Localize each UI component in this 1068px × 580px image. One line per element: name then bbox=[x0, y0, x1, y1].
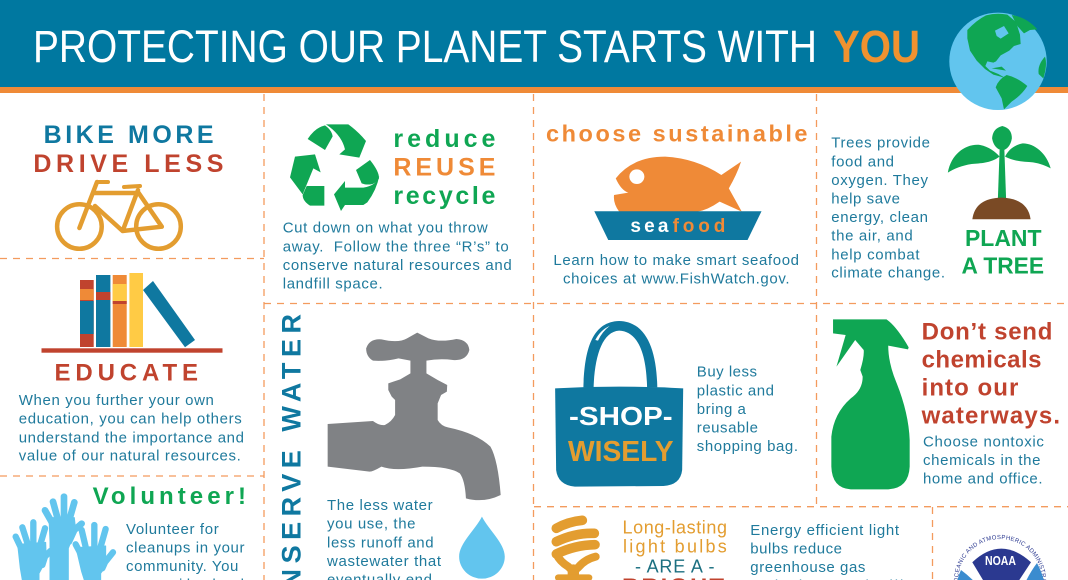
heading: chemicals warning: waterways. bbox=[921, 402, 1060, 429]
text: tree description: energy, clean bbox=[831, 209, 928, 226]
icon: shopping bag bbox=[555, 321, 683, 487]
panel: educate bbox=[19, 273, 244, 465]
icon: shopping bag: -SHOP- bbox=[569, 401, 673, 431]
text: reduce description: conserve natural resources and bbox=[283, 257, 512, 274]
text: tree description: climate change. bbox=[831, 265, 945, 282]
heading: plant a tree: A TREE bbox=[962, 252, 1044, 278]
text: educate description: When you further your own bbox=[19, 392, 214, 409]
icon: fish on plate bbox=[594, 157, 762, 240]
icon: globe bbox=[949, 13, 1047, 110]
header banner bbox=[0, 0, 1068, 93]
heading: bike more drive less: BIKE MORE bbox=[44, 121, 214, 149]
heading: choose sustainable: choose sustainable bbox=[546, 120, 808, 146]
heading: long-lasting bright idea bbox=[622, 517, 727, 580]
heading: reduce reuse recycle: recycle bbox=[393, 182, 495, 210]
panel: plant a tree bbox=[831, 126, 1051, 282]
panel: reduce reuse recycle bbox=[283, 124, 512, 292]
heading: long-lasting bright idea: - ARE A - bbox=[635, 556, 714, 576]
panel: light bulbs bbox=[556, 517, 903, 580]
heading: reduce reuse recycle: REUSE bbox=[393, 154, 495, 182]
title: PROTECTING OUR PLANET STARTS WITH bbox=[33, 21, 817, 72]
icon: light bulb bbox=[556, 520, 596, 580]
panel: volunteer bbox=[16, 483, 246, 580]
icon: faucet bbox=[328, 333, 501, 500]
text: shopping description: reusable bbox=[697, 419, 758, 436]
text: water description: The less water bbox=[327, 497, 433, 514]
panel: bike more drive less bbox=[33, 121, 223, 249]
icon: bicycle bbox=[57, 182, 181, 249]
title: YOU bbox=[833, 21, 920, 72]
panel: conserve water bbox=[276, 314, 505, 580]
text: light bulb description: greenhouse gas bbox=[750, 559, 865, 576]
text: shopping description: Buy less bbox=[697, 364, 757, 381]
heading: chemicals warning: into our bbox=[922, 374, 1018, 401]
heading: long-lasting bright idea: light bulbs bbox=[623, 537, 727, 557]
text: light bulb description: Energy efficient light bbox=[750, 522, 900, 539]
text: water description: you use, the bbox=[327, 516, 416, 533]
icon: seedling bbox=[948, 126, 1051, 219]
text: volunteer description: Volunteer for bbox=[126, 521, 219, 538]
text: light bulb description bbox=[750, 522, 903, 580]
text: reduce description: landfill space. bbox=[283, 276, 383, 292]
text: chemicals description: chemicals in the bbox=[923, 452, 1040, 469]
text: tree description: help combat bbox=[831, 246, 920, 263]
panel: no chemicals bbox=[831, 318, 1060, 489]
text: reduce description bbox=[283, 220, 512, 292]
text: educate description: understand the importance and bbox=[19, 429, 244, 446]
text: shopping description bbox=[697, 364, 798, 455]
text: shopping description: plastic and bbox=[697, 382, 774, 399]
icon: fish on plate: food bbox=[673, 216, 725, 237]
heading: plant a tree bbox=[962, 225, 1044, 278]
heading: long-lasting bright idea: Long-lasting bbox=[622, 517, 727, 537]
icon: recycle arrows bbox=[290, 124, 379, 211]
heading: educate: EDUCATE bbox=[54, 360, 198, 387]
text: water description: wastewater that bbox=[326, 553, 442, 570]
text: volunteer description: cleanups in your bbox=[126, 540, 244, 557]
icon: raised hands bbox=[16, 497, 113, 580]
heading: chemicals warning: chemicals bbox=[922, 346, 1042, 373]
heading: bike more drive less: DRIVE LESS bbox=[33, 150, 223, 178]
text: tree description bbox=[831, 135, 945, 282]
text: educate description: education, you can help others bbox=[19, 411, 242, 428]
icon: shopping bag: WISELY bbox=[568, 436, 674, 468]
text: seafood description: Learn how to make smart seafood bbox=[553, 252, 799, 269]
text: educate description: value of our natural resources. bbox=[19, 448, 241, 465]
heading: chemicals warning: Don’t send bbox=[922, 318, 1052, 345]
panel: shop wisely bbox=[555, 321, 798, 487]
text: tree description: food and bbox=[831, 153, 894, 170]
logo: NOAA: NOAA bbox=[985, 554, 1016, 568]
text: shopping description: shopping bag. bbox=[697, 438, 798, 455]
text: educate description bbox=[19, 392, 244, 465]
text: seafood description: choices at www.FishWatch.gov. bbox=[563, 270, 790, 287]
text: shopping description: bring a bbox=[697, 401, 747, 418]
panel: sustainable seafood bbox=[546, 120, 808, 287]
text: light bulb description: bulbs reduce bbox=[750, 540, 842, 557]
icon: spray bottle bbox=[831, 319, 910, 489]
text: reduce description: Cut down on what you throw bbox=[283, 220, 488, 237]
heading: volunteer: Volunteer! bbox=[93, 483, 246, 510]
heading: chemicals warning bbox=[921, 318, 1060, 429]
text: water description bbox=[326, 497, 442, 580]
text: tree description: the air, and bbox=[831, 228, 913, 245]
text: volunteer description bbox=[126, 521, 244, 580]
icon: fish on plate: sea bbox=[630, 216, 669, 237]
text: tree description: Trees provide bbox=[831, 135, 930, 152]
heading: plant a tree: PLANT bbox=[965, 225, 1042, 251]
text: water description: less runoff and bbox=[327, 534, 434, 551]
heading: reduce reuse recycle bbox=[393, 125, 495, 210]
text: reduce description: away. Follow the three “R’s” to bbox=[283, 238, 509, 255]
text: chemicals description: Choose nontoxic bbox=[923, 434, 1044, 451]
icon: books on shelf bbox=[42, 273, 222, 353]
heading: reduce reuse recycle: reduce bbox=[393, 125, 495, 153]
text: seafood description bbox=[553, 252, 799, 287]
text: volunteer description: community. You bbox=[126, 558, 238, 575]
text: chemicals description bbox=[923, 434, 1044, 488]
text: tree description: help save bbox=[831, 190, 900, 208]
heading: bike more drive less bbox=[33, 121, 223, 178]
text: tree description: oxygen. They bbox=[831, 172, 928, 189]
icon: water drop bbox=[459, 517, 505, 579]
text: chemicals description: home and office. bbox=[923, 471, 1042, 488]
